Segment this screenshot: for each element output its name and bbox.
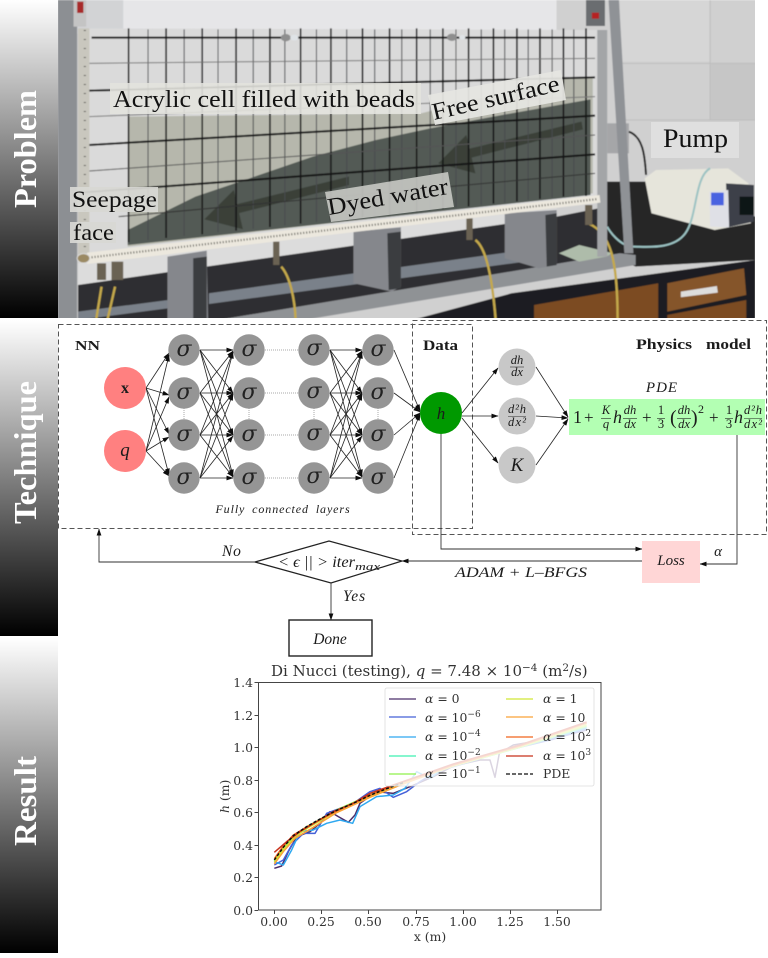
equation: PDE box: 2 [698, 402, 704, 416]
y-axis tick labels: 0.0 [233, 903, 253, 918]
sidebar: technique: Technique [7, 381, 43, 524]
box: done: Done [312, 631, 347, 648]
hidden layer 3: σ [306, 336, 322, 361]
node: K: K [510, 455, 525, 476]
label: seepage face: face [73, 220, 114, 245]
hidden layer 3 [298, 334, 330, 494]
label: pump: Pump [663, 124, 728, 153]
hidden layer 1: σ [176, 465, 192, 490]
hidden layer 1: σ [176, 422, 192, 447]
x-axis tick labels: 1.25 [496, 914, 524, 929]
node: dh/dx: dh [511, 353, 523, 367]
x-axis tick labels: 0.75 [402, 914, 430, 929]
chart title: −4 [522, 662, 538, 674]
y-axis tick labels: 0.6 [233, 805, 253, 820]
heading: NN: NN [75, 339, 100, 354]
label: PDE: PDE [645, 380, 678, 396]
equation: PDE box: h [734, 407, 743, 427]
label: yes: Yes [343, 588, 366, 605]
node: output h: h [437, 404, 445, 423]
hidden layer 2: σ [241, 380, 257, 405]
sidebar: result: Result [7, 756, 43, 846]
equation: PDE box: + [584, 408, 594, 427]
connections: dotted layer continuation [184, 350, 378, 478]
label: seepage face: Seepage [72, 187, 157, 212]
hidden layer 1: σ [176, 380, 192, 405]
arrow: h to loss [441, 434, 642, 549]
sidebar: problem [0, 0, 58, 318]
legend: α = 10 [543, 748, 585, 763]
equation: PDE box: q [603, 417, 609, 431]
x-axis tick labels: 0.25 [307, 914, 335, 929]
equation: PDE box: dx [678, 417, 690, 431]
node: input x: x [121, 380, 129, 397]
legend: α = 10 [425, 748, 467, 763]
node: second derivative: dx² [508, 415, 526, 429]
node: dh/dx [498, 348, 536, 386]
x-axis label: x (m) [414, 929, 446, 944]
chart title: (m [537, 662, 562, 680]
legend: α = 10 [425, 766, 467, 781]
legend: α = 0 [425, 691, 460, 706]
node: dh/dx: dx [511, 365, 523, 379]
node: input x [104, 367, 146, 409]
label: no: No [221, 543, 242, 560]
y-axis tick labels [233, 675, 253, 918]
label: alpha: α [714, 544, 723, 560]
box: loss: Loss [656, 553, 685, 569]
equation: PDE box: 3 [658, 417, 664, 431]
legend: PDE [543, 766, 570, 781]
hidden layer 4: σ [370, 380, 386, 405]
equation: PDE box: dh [678, 403, 690, 417]
panel: physics model dashed box [412, 320, 766, 534]
equation: PDE box: 3 [726, 417, 732, 431]
chart title: 2 [562, 662, 569, 674]
y-axis tick labels: 0.4 [233, 838, 253, 853]
label: acrylic cell: Acrylic cell filled with beads [113, 87, 415, 113]
hidden layer 2: σ [241, 465, 257, 490]
heading: data: Data [423, 338, 459, 354]
node: second derivative: d²h [508, 402, 526, 416]
plot curves [274, 722, 587, 868]
decision: stopping criterion: < ϵ || > iter [278, 554, 356, 571]
x-axis tick labels: 1.00 [449, 914, 477, 929]
panel: neural network dashed box [58, 324, 472, 528]
hidden layer 1 [168, 334, 200, 494]
arrow: no branch back to network [99, 529, 255, 562]
equation: PDE box: dx [624, 417, 636, 431]
equation: PDE box: dh [624, 403, 636, 417]
equation: PDE box: ) [691, 407, 698, 429]
y-axis label: h (m) [217, 780, 232, 813]
legend: α = 10 [543, 710, 586, 725]
equation: PDE box: dx² [744, 417, 762, 431]
hidden layer 1: σ [176, 337, 192, 362]
hidden layer 2: σ [241, 337, 257, 362]
connections: neural network edges [146, 350, 568, 478]
legend: 2 [585, 729, 591, 739]
y-axis tick labels: 1.0 [233, 740, 253, 755]
equation: PDE box: 1 [726, 403, 732, 417]
hidden layer 4: σ [370, 337, 386, 362]
decision: stopping criterion: max [355, 562, 381, 573]
label: dyed water: Dyed water [326, 174, 450, 221]
equation: PDE box: + [642, 408, 652, 427]
y-axis tick labels: 0.8 [233, 773, 253, 788]
hidden layer 4: σ [370, 465, 386, 490]
arrow: PDE to loss [700, 435, 737, 564]
chart: water table profile [217, 662, 601, 944]
legend: 3 [585, 748, 591, 758]
hidden layer 3: σ [306, 379, 322, 404]
legend: α = 10 [425, 710, 467, 725]
y-axis tick labels: 1.4 [233, 675, 253, 690]
legend: −2 [467, 748, 481, 758]
y-axis tick labels: 1.2 [233, 708, 253, 723]
legend: −6 [467, 710, 481, 720]
x-axis tick labels [260, 914, 571, 929]
plot axes [258, 682, 601, 910]
hidden layer 4 [362, 334, 394, 494]
legend [385, 688, 594, 786]
equation: PDE box: 1 [573, 407, 582, 427]
label: free surface: Free surface [430, 71, 562, 126]
caption: fully connected layers: Fully connected layers [214, 502, 351, 516]
label: optimizers: ADAM + L–BFGS [454, 565, 588, 581]
hidden layer 2 [233, 334, 265, 494]
chart title: Di Nucci (testing), q = 7.48 × 10 [271, 662, 522, 680]
equation: PDE box [569, 399, 765, 435]
legend: α = 1 [543, 691, 578, 706]
tick marks [254, 682, 558, 914]
hidden layer 4: σ [370, 422, 386, 447]
label: seepage face [70, 187, 158, 245]
legend: α = 10 [543, 729, 585, 744]
equation: PDE box: d²h [744, 403, 762, 417]
equation: PDE box: 1 [658, 403, 664, 417]
legend: −4 [467, 729, 481, 739]
equation: PDE box: h [613, 407, 622, 427]
hidden layer 2: σ [241, 422, 257, 447]
x-axis tick labels: 1.50 [543, 914, 571, 929]
x-axis tick labels: 0.00 [260, 914, 288, 929]
equation: PDE box: ( [670, 407, 677, 429]
x-axis tick labels: 0.50 [354, 914, 382, 929]
sidebar: technique [0, 320, 58, 636]
y-axis tick labels: 0.2 [233, 870, 253, 885]
node: input q [104, 430, 146, 472]
node: K [498, 446, 536, 484]
node: second derivative [498, 398, 536, 434]
node: output h [420, 392, 462, 434]
decision: stopping criterion [255, 541, 402, 583]
hidden layer 3: σ [306, 464, 322, 489]
sidebar: problem: Problem [7, 90, 43, 208]
label: pump [651, 122, 739, 158]
box: loss [642, 541, 700, 583]
panel: problem photo of acrylic cell [58, 0, 758, 320]
equation: PDE box: K [601, 403, 611, 417]
box: done [289, 620, 372, 656]
heading: physics: Physics [636, 337, 692, 353]
arrow: loss to stopping check [402, 560, 642, 562]
hidden layer 3: σ [306, 421, 322, 446]
equation: PDE box: + [709, 408, 719, 427]
legend: −1 [467, 766, 481, 776]
arrow: yes branch [330, 583, 332, 620]
heading: model: model [706, 337, 751, 353]
sidebar: result [0, 638, 58, 953]
node: input q: q [120, 440, 130, 461]
chart title: /s) [569, 662, 588, 680]
legend: α = 10 [425, 729, 467, 744]
